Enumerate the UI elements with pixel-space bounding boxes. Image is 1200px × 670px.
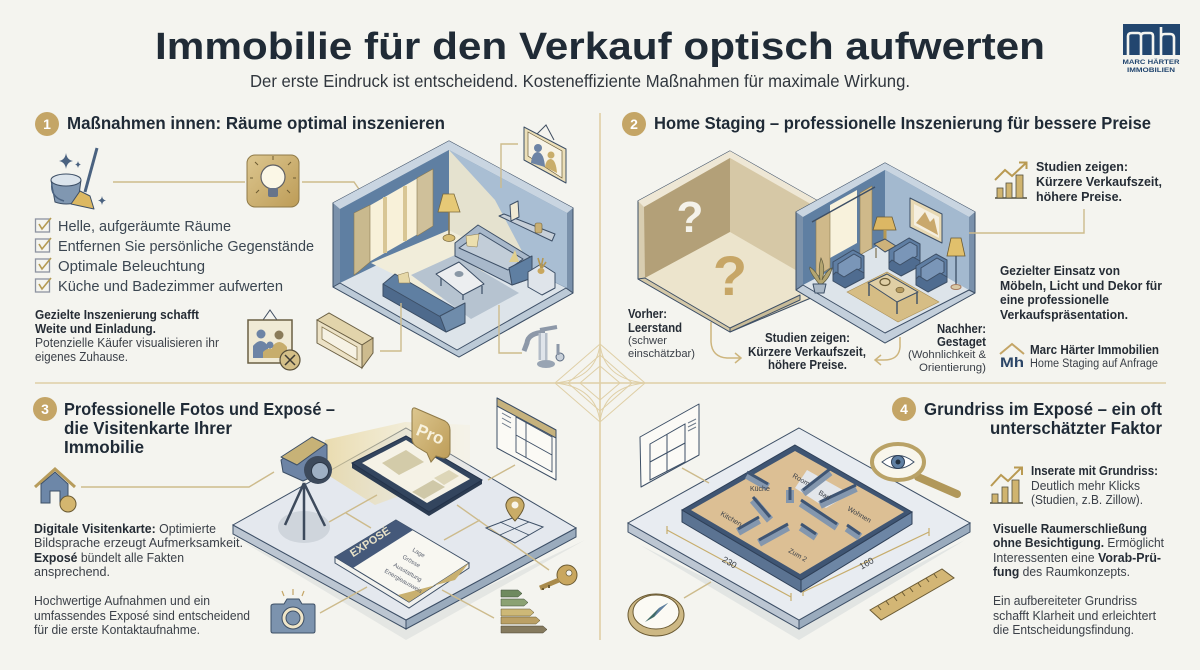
- light beam: [320, 422, 470, 505]
- number badge 4: 4: [900, 401, 908, 417]
- callout: Studien zeigen right: Kürzere Verkaufszeit,: [1036, 175, 1162, 189]
- icon: bucket and broom: [51, 148, 106, 209]
- icon: magnifier with eye: [872, 444, 957, 494]
- room labels: Wohnen: [846, 506, 872, 525]
- camera on tripod: [278, 437, 332, 543]
- heading 1: Maßnahmen innen: Räume optimal inszenieren: [67, 113, 445, 133]
- heading 3: Professionelle Fotos und Exposé –: [64, 399, 335, 419]
- exposé booklet: [335, 520, 469, 608]
- number badge 2: [622, 112, 646, 136]
- logo: Marc Härter Immobilien: IMMOBILIEN: [1127, 67, 1175, 74]
- subtitle: Der erste Eindruck ist entscheidend. Kosteneffiziente Maßnahmen für maximale Wirkung.: [250, 71, 910, 91]
- leader: cabinet: [380, 303, 401, 351]
- text: digitale Visitenkarte: [34, 522, 243, 579]
- number badge 3: [33, 397, 57, 421]
- text: digitale Visitenkarte: Bildsprache erzeugt Aufmerksamkeit.: [34, 536, 243, 550]
- brand note with small logo: Home Staging auf Anfrage: [1030, 358, 1158, 370]
- text: gezielter Einsatz: Gezielter Einsatz von: [1000, 264, 1120, 278]
- heading 4: unterschätzter Faktor: [990, 418, 1162, 438]
- text: visuelle Raumerschließung: Interessenten eine Vorab-Prü-: [993, 551, 1161, 565]
- text: Inszenierung: eigenes Zuhause.: [35, 350, 128, 364]
- connector: bulb to room: [302, 182, 363, 195]
- text: aufbereiteter Grundriss: die Entscheidungsfindung.: [993, 623, 1134, 637]
- leader: compass: [684, 582, 711, 598]
- text: aufbereiteter Grundriss: [993, 594, 1157, 637]
- text: hochwertige Aufnahmen: Hochwertige Aufnahmen und ein: [34, 594, 210, 608]
- title: Immobilie für den Verkauf optisch aufwerten: [155, 26, 1045, 68]
- dividers and central ornament: [35, 113, 1166, 640]
- question mark: floor: ?: [713, 244, 747, 307]
- callout: Studien zeigen right: [1036, 160, 1162, 204]
- brand note with small logo: Marc Härter Immobilien: [1030, 343, 1159, 357]
- callout: Studien zeigen right: Studien zeigen:: [1036, 160, 1128, 174]
- leaders on platform: [329, 465, 549, 570]
- label: Vorher: (schwer: [628, 335, 667, 347]
- text: visuelle Raumerschließung: Visuelle Raumerschließung: [993, 522, 1147, 536]
- illustration: staged room after: [796, 163, 975, 343]
- room labels: Bad: [817, 490, 831, 502]
- icon: cabinet: [317, 313, 373, 368]
- text: digitale Visitenkarte: ansprechend.: [34, 565, 110, 579]
- icon: document with plan: [640, 404, 699, 487]
- callout: Studien zeigen centre: [748, 331, 866, 372]
- logo: Marc Härter Immobilien: [1122, 24, 1180, 74]
- icon: light bulb tile: [247, 155, 299, 207]
- pro badge: Pro: [413, 420, 447, 449]
- number badge 3: 3: [41, 401, 49, 417]
- back sofa: [455, 225, 532, 285]
- panel 2: Home Staging: [622, 112, 1162, 374]
- checklist: [36, 218, 314, 295]
- exposé booklet: Lage: [411, 548, 426, 560]
- text: visuelle Raumerschließung: [993, 522, 1164, 579]
- window and curtains: [354, 169, 433, 275]
- text: gezielter Einsatz: eine professionelle: [1000, 293, 1109, 307]
- armchairs: [833, 238, 947, 292]
- tablet: [352, 436, 482, 516]
- icon: ruler: [870, 569, 954, 620]
- heading 3: Immobilie: [64, 437, 144, 457]
- illustration: isometric floor plan: 230: [720, 554, 739, 570]
- heading 3: die Visitenkarte Ihrer: [64, 418, 232, 438]
- text: Inszenierung: Gezielte Inszenierung schafft: [35, 308, 200, 322]
- illustration: isometric floor plan: [628, 428, 970, 640]
- logo: Marc Härter Immobilien: MARC HÄRTER: [1122, 58, 1180, 66]
- label: Nachher: Orientierung): [919, 362, 986, 374]
- leader: document: [682, 468, 709, 483]
- text: Inszenierung: Potenzielle Käufer visualisieren ihr: [35, 336, 219, 350]
- number badge 1: 1: [43, 116, 51, 132]
- text: gezielter Einsatz: Möbeln, Licht und Dekor für: [1000, 279, 1162, 293]
- exposé booklet: Grösse: [401, 555, 421, 570]
- check item 1: Helle, aufgeräumte Räume: [58, 218, 231, 235]
- wall picture: [910, 198, 942, 243]
- exposé booklet: Energieausweis: [383, 569, 423, 595]
- text: Inszenierung: [35, 308, 219, 364]
- connector: broom to bulb: [113, 181, 245, 183]
- outer walls: [682, 510, 801, 592]
- front sofa: [383, 272, 465, 332]
- callout: Inserate mit Grundriss: Deutlich mehr Klicks: [1031, 479, 1140, 493]
- arrow: after to studies: [875, 337, 900, 365]
- leader: house to camera: [81, 472, 274, 487]
- number badge 1: [35, 112, 59, 136]
- panel 1: Maßnahmen innen: [35, 112, 573, 370]
- label: Vorher: einschätzbar): [628, 348, 695, 360]
- illustration: isometric floor plan: 160: [857, 555, 876, 571]
- wall shelf: [499, 201, 555, 241]
- arrow: before to studies: [711, 322, 741, 363]
- illustration: platform with tablet and exposé: [233, 408, 585, 640]
- side table and lamp: [873, 217, 896, 258]
- text: hochwertige Aufnahmen: für die erste Kontaktaufnahme.: [34, 623, 200, 637]
- text: Inszenierung: Weite und Einladung.: [35, 322, 156, 336]
- nightstand and vase: [528, 258, 555, 295]
- label: Vorher: [628, 307, 695, 360]
- text: aufbereiteter Grundriss: Ein aufbereiteter Grundriss: [993, 594, 1137, 608]
- callout: Studien zeigen centre: Studien zeigen:: [765, 331, 850, 345]
- inner walls: [738, 469, 860, 543]
- rug: [411, 255, 519, 319]
- leader: tap: [499, 305, 522, 353]
- floor lamp: [947, 238, 965, 290]
- panel 3: Fotos und Exposé: [33, 397, 585, 640]
- room labels: Kitchen: [719, 511, 743, 528]
- icon: photo camera: [271, 589, 315, 633]
- rug: [847, 272, 939, 322]
- dimension lines: [667, 526, 929, 601]
- text: aufbereiteter Grundriss: schafft Klarheit und erleichtert: [993, 609, 1157, 623]
- pro badge: [412, 408, 450, 462]
- text: hochwertige Aufnahmen: umfassendes Exposé sind entscheidend: [34, 609, 250, 623]
- number badge 4: [892, 397, 916, 421]
- heading 2: Home Staging – professionelle Inszenierung für bessere Preise: [654, 113, 1151, 133]
- potted plant: [810, 258, 832, 293]
- icon: rising bar chart: [995, 162, 1027, 198]
- floor lamp: [438, 194, 460, 242]
- number badge 2: 2: [630, 116, 638, 132]
- leaders: photo camera and energy: [320, 587, 494, 618]
- room labels: [719, 473, 872, 564]
- text: gezielter Einsatz: Verkaufspräsentation.: [1000, 308, 1128, 322]
- callout: Inserate mit Grundriss: (Studien, z.B. Zillow).: [1031, 493, 1143, 507]
- text: digitale Visitenkarte: Exposé bündelt alle Fakten: [34, 551, 184, 565]
- panel 4: Grundriss: [628, 397, 1164, 640]
- icon: key: [540, 565, 577, 590]
- window and curtains: [812, 186, 875, 277]
- heading 4: [924, 399, 1162, 438]
- check item 4: Küche und Badezimmer aufwerten: [58, 278, 283, 295]
- label: Vorher: Leerstand: [628, 321, 682, 335]
- leader: room to studies: [969, 209, 1084, 233]
- room labels: Zum 2: [787, 548, 808, 564]
- room labels: Room: [791, 473, 811, 488]
- callout: Inserate mit Grundriss: Inserate mit Grundriss:: [1031, 464, 1158, 478]
- callout: Studien zeigen centre: höhere Preise.: [768, 358, 847, 372]
- icon: house with coin: [35, 469, 76, 512]
- icon: browser with floor plan: [497, 398, 556, 480]
- brand note with small logo: Mh: [1000, 354, 1024, 370]
- coffee table: [436, 262, 484, 300]
- check item 3: Optimale Beleuchtung: [58, 258, 205, 275]
- map pin on grid: [486, 497, 543, 543]
- heading 3: [64, 399, 335, 457]
- text: digitale Visitenkarte: Digitale Visitenkarte: Optimierte: [34, 522, 216, 536]
- check item 2: Entfernen Sie persönliche Gegenstände: [58, 238, 314, 255]
- callout: Inserate mit Grundriss: [1031, 464, 1158, 507]
- icon: family photo with cross: [248, 310, 300, 370]
- question mark: wall: ?: [677, 193, 703, 242]
- illustration: empty room before: [638, 151, 830, 332]
- brand note with small logo: [1000, 343, 1159, 370]
- illustration: isometric living room: [333, 141, 573, 357]
- text: visuelle Raumerschließung: ohne Besichtigung. Ermöglicht: [993, 536, 1164, 550]
- label: Nachher: Nachher:: [937, 322, 986, 336]
- icon: bar chart: [990, 468, 1023, 503]
- label: Nachher: [908, 322, 987, 374]
- text: gezielter Einsatz: [1000, 264, 1162, 322]
- icon: framed picture top right: [524, 125, 566, 183]
- exposé booklet: Ausstattung: [392, 563, 422, 584]
- callout: Studien zeigen right: höhere Preise.: [1036, 190, 1122, 204]
- icon: water tap: [524, 327, 564, 368]
- label: Vorher: Vorher:: [628, 307, 667, 321]
- text: visuelle Raumerschließung: fung des Raumkonzepts.: [993, 565, 1130, 579]
- heading 4: Grundriss im Exposé – ein oft: [924, 399, 1162, 419]
- label: Nachher: Gestaget: [937, 335, 987, 349]
- icon: compass: [628, 594, 684, 636]
- exposé booklet: EXPOSÉ: [348, 524, 393, 560]
- leader: picture: [501, 144, 518, 188]
- text: hochwertige Aufnahmen: [34, 594, 250, 637]
- coffee table with bowls: [868, 274, 918, 314]
- label: Nachher: (Wohnlichkeit &: [908, 349, 987, 361]
- callout: Studien zeigen centre: Kürzere Verkaufszeit,: [748, 345, 866, 359]
- room labels: Küche: [750, 486, 770, 493]
- icon: energy label bars: [501, 590, 547, 633]
